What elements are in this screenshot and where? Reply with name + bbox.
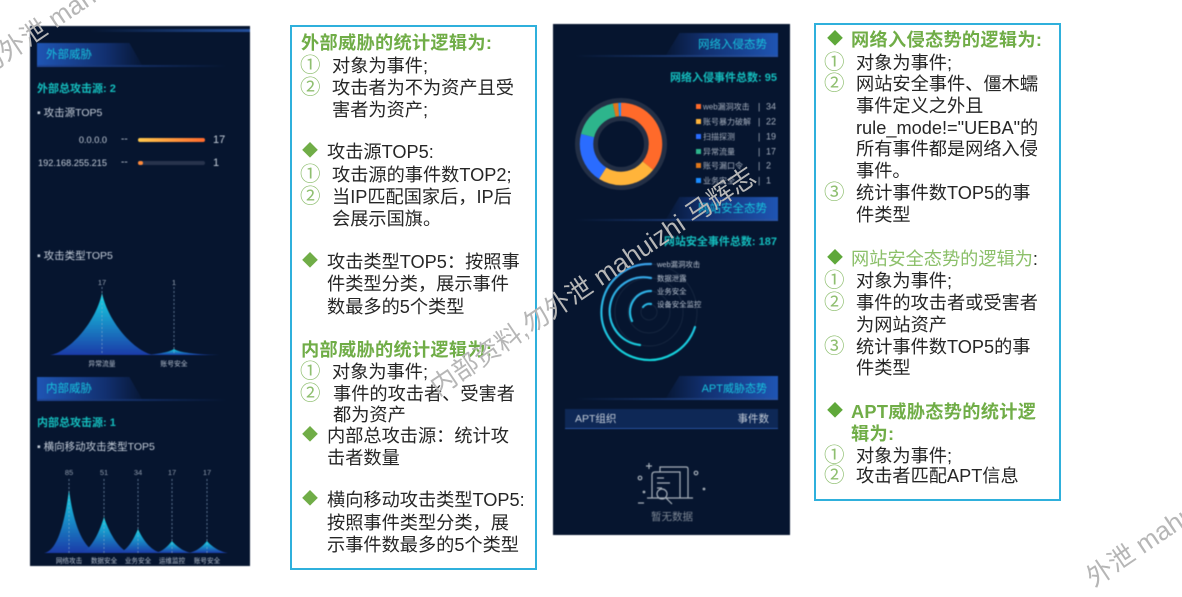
list: internal logic: ◆ [302,427,318,444]
list: website security logic: 网站安全态势的逻辑为: [851,249,1038,269]
list: network intrusion logic: rule_mode!="UEBA"的 [856,118,1038,138]
panel: external and internal threat dashboard [30,26,250,566]
list: external logic: 攻击者为不为资产且受 [332,78,514,98]
list: attack source logic: ② [300,185,320,208]
bar row 1: -- [121,134,128,145]
chart: lateral movement attack type top5: 运维监控 [159,556,186,565]
list: external logic: ② [300,76,320,99]
list: lateral movement logic: 横向移动攻击类型TOP5: [327,490,525,510]
list: internal logic: ① [300,360,320,383]
list: network intrusion logic: 件类型 [856,205,911,225]
chart: lateral movement attack type top5 [44,468,228,565]
box frame [290,25,537,570]
list: internal logic [300,360,515,468]
legend: intrusion types: 账号暴力破解 [703,116,751,126]
text: intrusion total: 网络入侵事件总数: 95 [670,72,777,84]
list: APT threat logic: ② [824,464,844,487]
list: APT threat logic [824,402,1036,487]
heading: network intrusion: 网络入侵态势 [698,39,767,51]
list: lateral movement logic: 按照事件类型分类，展 [327,513,509,533]
panel: intrusion and website logic [814,23,1061,501]
chart: website radial arcs: 设备安全监控 [657,300,702,309]
list: external logic [300,54,514,120]
list: website security logic: ③ [824,335,844,358]
chart: lateral movement attack type top5: 17 [203,468,211,477]
heading: APT threat: APT威胁态势 [702,383,767,395]
list: website security logic: ② [824,291,844,314]
text: lateral movement heading: ▪ 横向移动攻击类型TOP5 [37,441,155,453]
list: attack source logic: 攻击源TOP5: [327,142,434,162]
list: external logic: ① [300,54,320,77]
chart: lateral movement attack type top5: 网络攻击 [56,556,83,565]
legend: intrusion types: 17 [766,146,776,156]
heading: external threat: 外部威胁 [46,49,92,61]
list: internal logic: 事件的攻击者、受害者 [333,384,515,404]
list: website security logic [824,249,1038,378]
legend: intrusion types [695,102,776,186]
chart: attack type top5: 1 [172,278,176,287]
list: APT threat logic: ◆ [827,403,843,420]
panel: external threat logic [290,25,537,570]
text: website total: 网站安全事件总数: 187 [664,236,777,248]
list: attack source logic: ◆ [302,143,318,160]
list: attack type logic: 攻击类型TOP5：按照事 [327,252,520,272]
heading: internal threat [36,376,210,402]
chart: lateral movement attack type top5: 34 [134,468,142,477]
list: attack type logic: ◆ [302,253,318,270]
text: attack type top5 heading: ▪ 攻击类型TOP5 [37,250,113,262]
bar row 2: 1 [213,157,219,169]
bar chart: attack source top5 [38,134,226,169]
legend: intrusion types: | [758,146,760,156]
text: internal total attack sources: 内部总攻击源: 1 [37,417,116,429]
list: network intrusion logic: 对象为事件; [856,53,952,73]
heading: network intrusion [590,32,779,58]
chart: website radial arcs: 业务安全 [657,287,687,296]
list: lateral movement logic: 示事件数最多的5个类型 [327,535,519,555]
table header: APT: 事件数 [738,413,769,425]
chart: attack type top5: 异常流量 [88,359,116,368]
list: network intrusion logic: 事件定义之外且 [856,96,983,116]
heading: external threat [36,42,210,68]
list: website security logic: 对象为事件; [856,271,952,291]
legend: intrusion types: | [758,160,760,170]
legend: intrusion types: 业务安全 [703,176,735,186]
legend: intrusion types: 19 [766,132,776,142]
list: network intrusion logic: 网络入侵态势的逻辑为: [851,30,1042,50]
table header: APT [565,409,778,429]
chart: attack type top5: 账号安全 [160,359,188,368]
legend: intrusion types: 22 [766,116,776,126]
legend: intrusion types: | [758,116,760,126]
list: APT threat logic: ① [824,444,844,467]
list: APT threat logic: APT威胁态势的统计逻 [851,402,1036,422]
box frame [814,23,1061,501]
heading: internal threat: 内部威胁 [46,383,92,395]
bar row 2: 192.168.255.215 [38,158,107,168]
list: attack source logic: 当IP匹配国家后，IP后 [332,187,512,207]
legend: intrusion types: 扫描探测 [703,132,735,142]
legend: intrusion types: | [758,132,760,142]
text: no data: 暂无数据 [651,511,693,523]
text: external total attack sources: 外部总攻击源: 2 [37,83,116,95]
list: attack type logic: 件类型分类，展示事件 [327,274,509,294]
bar row 1: 17 [213,134,225,146]
heading: website security: 网站安全态势 [698,203,767,215]
list: website security logic: 件类型 [856,358,911,378]
chart: website radial arcs [600,260,702,362]
legend: intrusion types: 1 [766,176,771,186]
heading: APT threat [590,375,779,401]
list: attack type logic [302,252,520,317]
list: attack type logic: 数最多的5个类型 [327,297,464,317]
list: website security logic: 事件的攻击者或受害者 [856,293,1038,313]
list: external logic: 对象为事件; [332,56,428,76]
list: internal logic: 击者数量 [327,448,400,468]
bar row 1: 0.0.0.0 [79,135,107,145]
list: APT threat logic: 对象为事件; [856,446,952,466]
list: website security logic: 统计事件数TOP5的事 [856,337,1030,357]
list: network intrusion logic: ◆ [827,31,843,48]
list: lateral movement logic [302,490,525,555]
chart: lateral movement attack type top5: 数据安全 [91,556,118,565]
list: attack source logic: ① [300,163,320,186]
icon: empty data documents [637,462,706,505]
chart: attack type top5: 17 [98,278,106,287]
list: attack source logic: 会展示国旗。 [332,209,441,229]
chart: lateral movement attack type top5: 85 [65,468,73,477]
chart: website radial arcs: 数据泄露 [657,274,687,283]
list: network intrusion logic: 网站安全事件、僵木蠕 [856,74,1038,94]
heading: website security [590,196,779,222]
list: attack source logic: 攻击源的事件数TOP2; [332,165,512,185]
chart: intrusion donut [574,98,668,190]
list: website security logic: 为网站资产 [856,315,947,335]
legend: intrusion types: 账号漏口令 [703,160,743,170]
table header: APT: APT组织 [575,413,616,425]
panel: network, website and APT dashboard [553,24,790,535]
top stripe [90,29,250,32]
list: internal logic: 都为资产 [333,405,406,425]
legend: intrusion types: | [758,102,760,112]
list: external logic: 害者为资产; [332,100,428,120]
heading: internal logic: 内部威胁的统计逻辑为: [301,340,492,360]
bar row 2: -- [121,157,128,168]
chart: lateral movement attack type top5: 51 [100,468,108,477]
legend: intrusion types: | [758,176,760,186]
text: attack source top5 heading: ▪ 攻击源TOP5 [37,107,102,119]
bar row 2 [38,157,220,169]
bar row 1 [78,134,226,146]
legend: intrusion types: 异常流量 [703,146,735,156]
chart: lateral movement attack type top5: 业务安全 [125,556,152,565]
chart: lateral movement attack type top5: 账号安全 [194,556,221,565]
list: network intrusion logic: ② [824,72,844,95]
legend: intrusion types: web漏洞攻击 [702,102,750,112]
list: network intrusion logic: 所有事件都是网络入侵 [856,139,1038,159]
list: website security logic: ① [824,269,844,292]
chart: lateral movement attack type top5: 17 [168,468,176,477]
watermark: center: 内部资料,勿外泄 mahuizhi 马辉志 [425,161,761,401]
list: APT threat logic: 辑为: [851,424,894,444]
list: lateral movement logic: ◆ [302,491,318,508]
list: network intrusion logic: ① [824,51,844,74]
chart: attack type top5 [50,278,216,368]
list: APT threat logic: 攻击者匹配APT信息 [856,466,1019,486]
list: network intrusion logic: ③ [824,181,844,204]
list: attack source logic [300,142,512,229]
list: network intrusion logic: 事件。 [856,161,911,181]
list: internal logic: ② [300,382,320,405]
chart: website radial arcs: web漏洞攻击 [656,260,700,269]
list: website security logic: ◆ [827,250,843,267]
list: network intrusion logic [824,30,1042,225]
list: network intrusion logic: 统计事件数TOP5的事 [856,183,1030,203]
legend: intrusion types: 2 [766,160,771,170]
list: internal logic: 对象为事件; [332,362,428,382]
heading: external logic: 外部威胁的统计逻辑为: [301,33,492,53]
list: internal logic: 内部总攻击源：统计攻 [327,426,509,446]
legend: intrusion types: 34 [766,102,776,112]
